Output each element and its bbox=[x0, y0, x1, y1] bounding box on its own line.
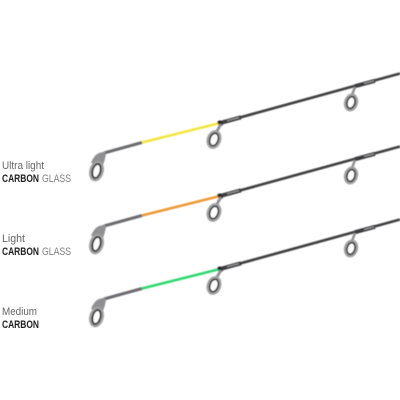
label: medium carbon: CARBON bbox=[2, 319, 39, 331]
label: ultra light carbon glass bbox=[2, 160, 71, 185]
rod 3: medium, green section bbox=[89, 220, 400, 327]
label: ultra light carbon glass: Ultra light bbox=[2, 160, 44, 172]
label: light carbon glass: CARBON bbox=[2, 246, 39, 258]
rod 2: light, orange section bbox=[89, 146, 400, 254]
label: light carbon glass: Light bbox=[2, 233, 25, 245]
label: light carbon glass: GLASS bbox=[42, 246, 71, 258]
label: ultra light carbon glass: GLASS bbox=[42, 173, 71, 185]
label: light carbon glass bbox=[2, 233, 71, 258]
rod 1: ultra light, yellow section bbox=[89, 74, 400, 181]
label: medium carbon bbox=[2, 306, 39, 331]
label: medium carbon: Medium bbox=[2, 306, 37, 318]
label: ultra light carbon glass: CARBON bbox=[2, 173, 39, 185]
